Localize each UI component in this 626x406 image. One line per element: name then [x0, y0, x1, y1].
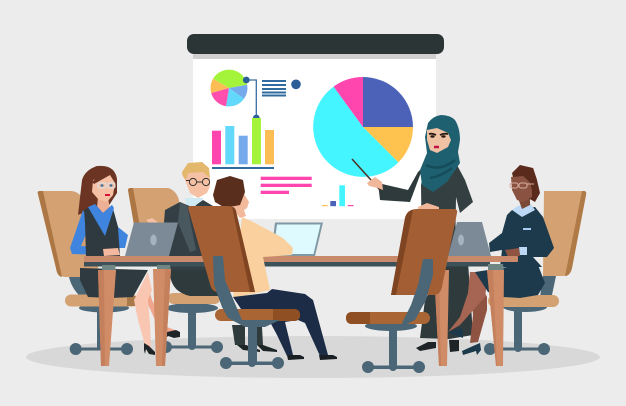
floor shadow: [26, 336, 600, 378]
chair: front right: [346, 209, 457, 373]
laptop: right: [448, 222, 491, 256]
pointer: [352, 159, 380, 190]
chart: bar chart: [212, 118, 274, 169]
chart: small pie: [211, 70, 247, 107]
glasses: right woman: [510, 183, 534, 188]
person: hijab presenter: [352, 115, 473, 352]
connector: pie to bar: [243, 77, 260, 121]
chair: blond man: [128, 188, 223, 353]
legend dot: [291, 80, 301, 89]
laptop: middle: [271, 222, 323, 256]
laptop: left: [125, 222, 178, 256]
person: left woman: [70, 166, 180, 355]
person: blond man: [164, 162, 277, 352]
chart: mini bars: [322, 185, 353, 206]
glasses: blond man: [186, 178, 210, 186]
glasses: left woman: [98, 183, 115, 188]
panel: projection screen: [187, 34, 444, 219]
chair: left woman: [38, 191, 138, 355]
person: right woman: [448, 165, 554, 355]
chair: right woman: [484, 191, 586, 355]
chair and person: front man: [188, 176, 337, 369]
table legs: [98, 264, 504, 366]
table: [84, 256, 518, 266]
chart: large pie: [313, 77, 413, 177]
pink text lines: [261, 177, 312, 194]
legend lines: [262, 80, 286, 96]
